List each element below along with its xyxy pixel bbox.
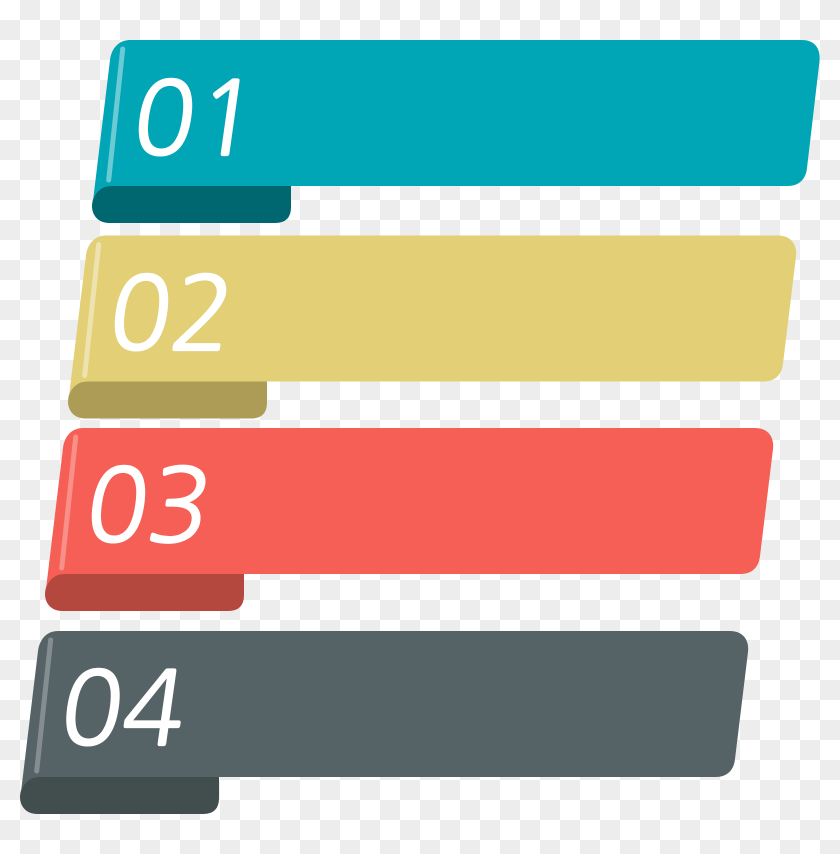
banner 03 bbox=[45, 428, 773, 611]
banner 04 fold bbox=[20, 776, 219, 814]
banner 02 fold bbox=[68, 380, 267, 418]
banner 01 bbox=[92, 40, 820, 223]
banner 01 fold bbox=[92, 185, 291, 223]
banner 01 body bbox=[92, 40, 820, 205]
number 04: 04 bbox=[54, 657, 192, 760]
banner 03 fold bbox=[45, 573, 244, 611]
banner 03 body bbox=[46, 428, 773, 593]
number 03: 03 bbox=[80, 454, 218, 557]
banner 02 body bbox=[68, 236, 796, 400]
number 02: 02 bbox=[103, 262, 241, 365]
banner 04 body bbox=[20, 631, 748, 796]
banner 04 highlight bbox=[37, 640, 51, 771]
number 01: 01 bbox=[127, 67, 265, 170]
banner 02 bbox=[68, 236, 796, 418]
banner 03 highlight bbox=[62, 437, 76, 568]
banner 02 highlight bbox=[85, 244, 99, 376]
banner 01 highlight bbox=[109, 49, 123, 180]
banner 04 bbox=[20, 631, 748, 814]
